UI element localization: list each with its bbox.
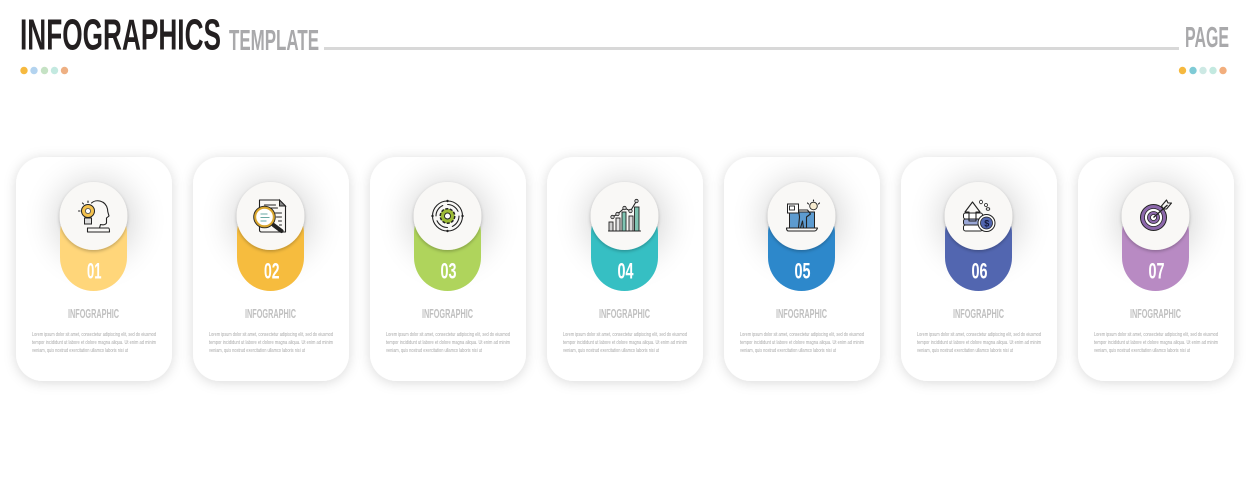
body text: tempor incididunt ut labore et dolore magna aliqua. Ut enim ad minim xyxy=(740,340,864,346)
number: 02 xyxy=(264,258,280,284)
panel: step 07 xyxy=(1078,157,1234,381)
icon circle xyxy=(60,182,128,250)
icon circle xyxy=(236,182,304,250)
number: 01 xyxy=(87,258,102,284)
icon: coins with up arrow: $ xyxy=(984,218,989,228)
heading: INFOGRAPHIC xyxy=(245,306,296,321)
body text: Lorem ipsum dolor sit amet, consectetur adipiscing elit, sed do eiusmod xyxy=(917,332,1041,338)
icon: coins with up arrow xyxy=(964,200,995,232)
icon: presenter at laptop xyxy=(786,200,820,231)
body text: veniam, quis nostrud exercitation ullamco laboris nisi ut xyxy=(32,348,128,354)
pill xyxy=(414,200,481,291)
icon circle xyxy=(590,182,658,250)
heading: INFOGRAPHIC xyxy=(776,306,827,321)
header rule xyxy=(324,47,1179,50)
body text: veniam, quis nostrud exercitation ullamco laboris nisi ut xyxy=(917,348,1013,354)
body text: Lorem ipsum dolor sit amet, consectetur adipiscing elit, sed do eiusmod xyxy=(563,332,687,338)
panel: step 04 xyxy=(547,157,703,381)
icon: gear with orbits xyxy=(431,200,464,232)
pill xyxy=(237,200,304,291)
number: 07 xyxy=(1148,258,1164,284)
body text xyxy=(209,332,333,354)
body text: tempor incididunt ut labore et dolore magna aliqua. Ut enim ad minim xyxy=(32,340,156,346)
number: 03 xyxy=(440,258,456,284)
body text: Lorem ipsum dolor sit amet, consectetur adipiscing elit, sed do eiusmod xyxy=(740,332,864,338)
right colour dots xyxy=(1179,67,1227,74)
panel: step 05 xyxy=(724,157,880,381)
body text: veniam, quis nostrud exercitation ullamco laboris nisi ut xyxy=(563,348,659,354)
heading: INFOGRAPHIC xyxy=(1130,306,1181,321)
body text: Lorem ipsum dolor sit amet, consectetur adipiscing elit, sed do eiusmod xyxy=(386,332,510,338)
panel: step 06 xyxy=(901,157,1057,381)
body text: veniam, quis nostrud exercitation ullamco laboris nisi ut xyxy=(386,348,482,354)
body text xyxy=(1094,332,1218,354)
body text xyxy=(917,332,1041,354)
body text: tempor incididunt ut labore et dolore magna aliqua. Ut enim ad minim xyxy=(209,340,333,346)
icon: head with light bulb xyxy=(78,201,110,232)
body text: Lorem ipsum dolor sit amet, consectetur adipiscing elit, sed do eiusmod xyxy=(32,332,156,338)
icon circle xyxy=(1122,182,1190,250)
body text xyxy=(386,332,510,354)
pill xyxy=(591,200,658,291)
number: 04 xyxy=(618,258,634,284)
heading: INFOGRAPHIC xyxy=(422,306,473,321)
body text: veniam, quis nostrud exercitation ullamco laboris nisi ut xyxy=(740,348,836,354)
pill xyxy=(1122,200,1189,291)
body text: veniam, quis nostrud exercitation ullamco laboris nisi ut xyxy=(1094,348,1190,354)
icon circle xyxy=(414,182,482,250)
left colour dots xyxy=(20,67,68,74)
icon: document and magnifier xyxy=(254,200,286,232)
heading: INFOGRAPHIC xyxy=(68,306,119,321)
icon circle xyxy=(768,182,836,250)
icon: rising bar chart xyxy=(608,199,640,231)
body text: tempor incididunt ut labore et dolore magna aliqua. Ut enim ad minim xyxy=(917,340,1041,346)
body text xyxy=(740,332,864,354)
body text: tempor incididunt ut labore et dolore magna aliqua. Ut enim ad minim xyxy=(563,340,687,346)
title: INFOGRAPHICS xyxy=(20,10,221,60)
subtitle: TEMPLATE xyxy=(229,25,319,57)
body text: veniam, quis nostrud exercitation ullamco laboris nisi ut xyxy=(209,348,305,354)
number: 06 xyxy=(972,258,988,284)
body text: Lorem ipsum dolor sit amet, consectetur adipiscing elit, sed do eiusmod xyxy=(209,332,333,338)
pill xyxy=(945,200,1012,291)
heading: INFOGRAPHIC xyxy=(599,306,650,321)
panel: step 02 xyxy=(193,157,349,381)
body text: tempor incididunt ut labore et dolore magna aliqua. Ut enim ad minim xyxy=(386,340,510,346)
number: 05 xyxy=(794,258,810,284)
icon circle xyxy=(944,182,1012,250)
panel: step 03 xyxy=(370,157,526,381)
pill xyxy=(768,200,835,291)
body text xyxy=(32,332,156,354)
body text xyxy=(563,332,687,354)
pill xyxy=(60,200,127,291)
heading: INFOGRAPHIC xyxy=(953,306,1004,321)
panel: step 01 xyxy=(16,157,172,381)
icon: target with arrow xyxy=(1140,200,1172,230)
